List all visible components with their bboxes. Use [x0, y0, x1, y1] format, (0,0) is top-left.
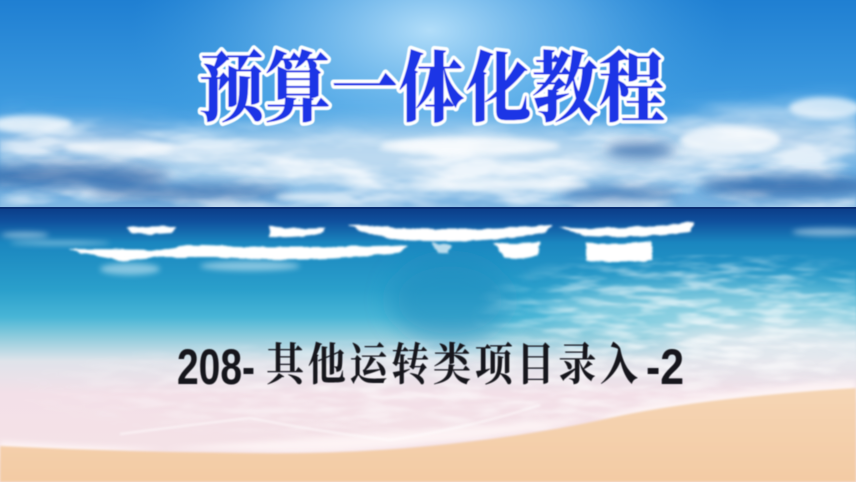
waves — [1, 222, 856, 275]
subtitle — [177, 339, 684, 395]
sky background — [0, 0, 856, 210]
subtitle: -2 — [646, 339, 684, 395]
subtitle: 208- — [177, 339, 255, 395]
title: 预算一体化教程 — [198, 48, 665, 132]
clouds — [0, 92, 856, 215]
subtitle: 其他运转类项目录入 — [266, 340, 638, 390]
sea — [0, 207, 856, 482]
foam edge and sand — [0, 380, 856, 482]
